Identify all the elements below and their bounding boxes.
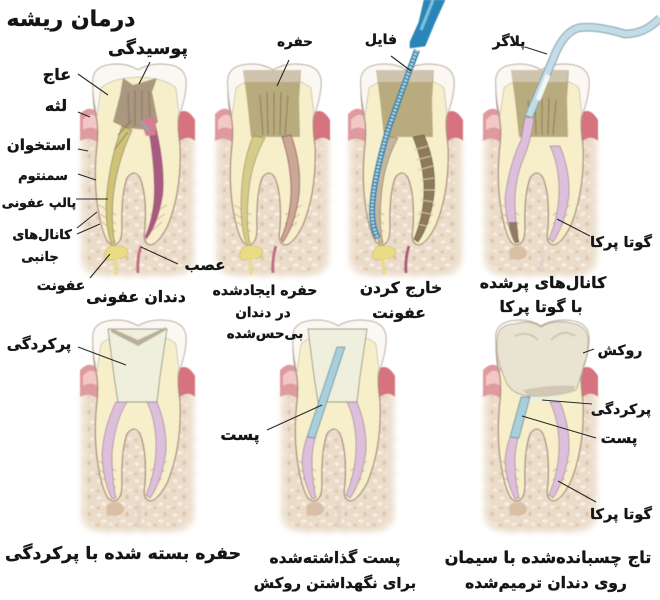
labels: removal [360, 32, 442, 322]
labels: infected tooth: کانال‌های [12, 228, 72, 243]
labels: filling: حفره بسته شده با پرکردگی [5, 543, 241, 564]
labels: filling [5, 335, 241, 564]
labels: infected tooth: دندان عفونی [86, 288, 186, 306]
labels: crown: گوتا پرکا [590, 505, 652, 523]
tooth: closed with filling [80, 320, 195, 532]
tool: plugger [529, 18, 660, 116]
labels: post: پست [220, 425, 260, 445]
labels: filled canals: کانال‌های پرشده [480, 273, 607, 293]
labels: filled canals [480, 33, 652, 317]
labels: removal: فایل [365, 32, 397, 48]
labels: cavity tooth: بی‌حس‌شده [227, 326, 303, 342]
tooth: infected [80, 64, 195, 276]
labels: infected tooth: سمنتوم [18, 169, 68, 184]
tooth: infection removed [348, 64, 463, 276]
labels: filled canals: گوتا پرکا [590, 233, 652, 251]
labels: crown: روی دندان ترمیم‌شده [465, 574, 627, 592]
labels: cavity tooth: حفره ایجادشده [213, 283, 317, 299]
labels: post [220, 425, 416, 592]
labels: infected tooth: پوسیدگی [108, 38, 188, 59]
labels: removal: خارج کردن [360, 279, 442, 297]
labels: infected tooth: استخوان [7, 136, 71, 154]
labels: crown: روکش [598, 343, 642, 359]
labels: infected tooth: عصب [185, 256, 225, 274]
labels: cavity tooth: در دندان [235, 305, 291, 321]
tooth: cavity created [215, 64, 330, 276]
labels: infected tooth: عفونت [37, 278, 85, 294]
labels: infected tooth: جانبی [21, 250, 59, 265]
labels: filled canals: با گوتا پرکا [499, 297, 583, 317]
labels: crown: تاج چسبانده‌شده با سیمان [445, 548, 651, 568]
labels: filling: پرکردگی [7, 335, 71, 354]
tooth: crown cemented [483, 320, 598, 532]
tool: file [372, 0, 445, 238]
leader lines [76, 47, 596, 502]
labels: crown [445, 343, 652, 592]
labels: cavity tooth [213, 34, 317, 342]
tooth: canals filled with gutta-percha [483, 64, 598, 276]
labels: infected tooth [2, 38, 225, 306]
labels: crown: پست [601, 429, 637, 448]
labels: infected tooth: عاج [43, 65, 71, 84]
labels: infected tooth: پالپ عفونی [2, 195, 76, 210]
labels: post: پست گذاشته‌شده [270, 548, 400, 568]
tooth: post placed [280, 320, 395, 532]
labels: filled canals: پلاگر [492, 33, 525, 50]
labels: post: برای نگهداشتن روکش [254, 574, 416, 592]
labels: cavity tooth: حفره [277, 34, 313, 50]
labels: removal: عفونت [372, 304, 426, 322]
title: درمان ریشه [7, 7, 135, 32]
labels: infected tooth: لثه [45, 96, 67, 115]
labels: crown: پرکردگی [591, 401, 651, 418]
